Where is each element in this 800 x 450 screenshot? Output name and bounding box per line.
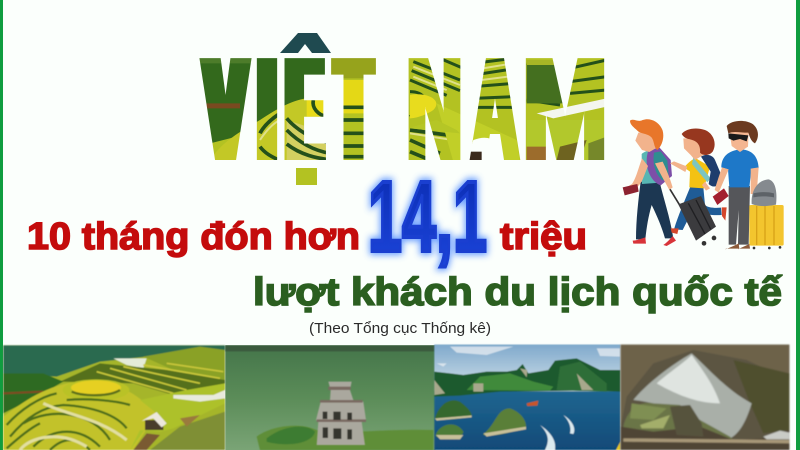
big number 14,1: 14,1	[368, 161, 487, 273]
photo: Hoan Kiem lake turtle tower	[225, 345, 435, 450]
photo: Son Doong cave	[621, 345, 789, 450]
traveller 2	[670, 129, 727, 234]
right green border	[796, 0, 800, 450]
headline red part 1: 10 tháng đón hơn	[27, 216, 360, 258]
headline red part 2: triệu	[500, 216, 587, 258]
icon: three travellers with luggage	[623, 119, 784, 249]
yellow suitcase	[749, 205, 784, 249]
headline green line: lượt khách du lịch quốc tế	[253, 271, 782, 314]
grey backpack	[752, 179, 776, 206]
rolling suitcase	[670, 189, 716, 246]
source note: (Theo Tổng cục Thống kê)	[309, 321, 491, 337]
tower	[267, 382, 366, 445]
traveller 1	[623, 119, 676, 246]
traveller 3	[713, 121, 759, 249]
big number 14,1: 14,1	[368, 161, 487, 273]
photo: rice terraces	[3, 345, 225, 450]
photo: Ha Long Bay	[434, 345, 620, 450]
island	[257, 426, 433, 450]
left green border	[0, 0, 3, 450]
title: VIỆT NAM with rice terrace fill	[199, 33, 604, 185]
big number 14,1	[368, 161, 487, 273]
